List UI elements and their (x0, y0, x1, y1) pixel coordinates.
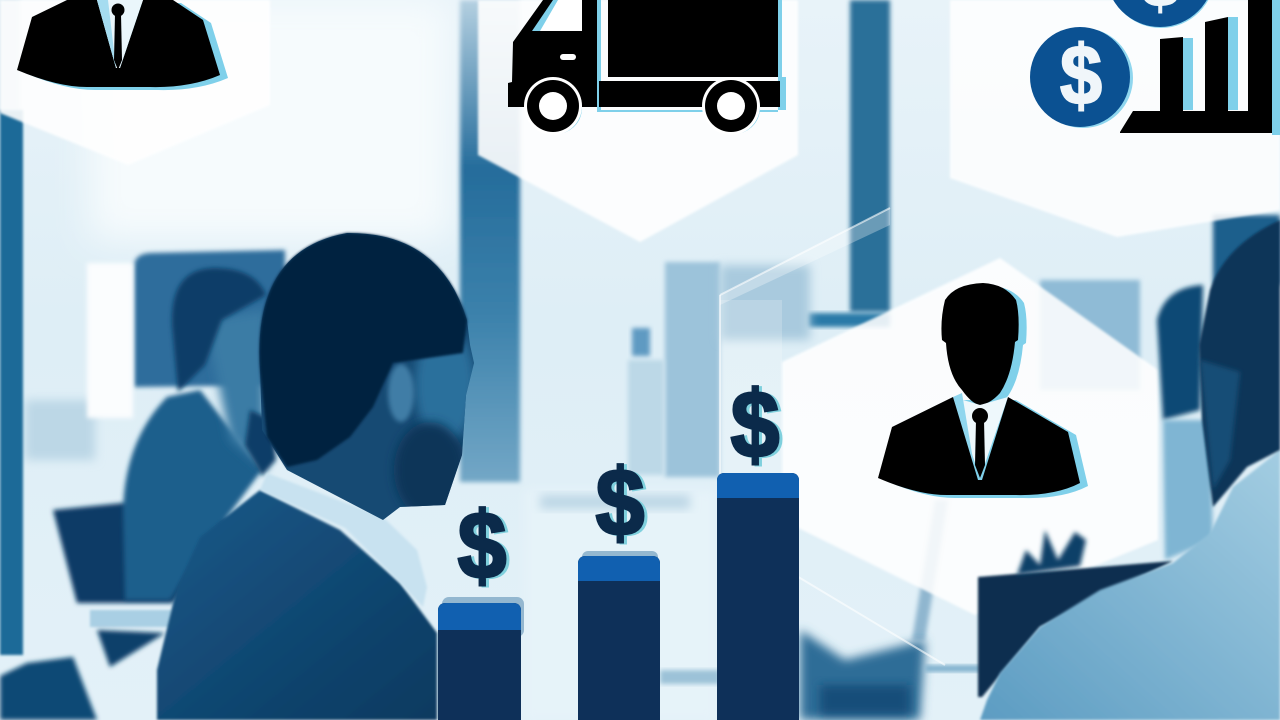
icon: businessman top left (17, 0, 228, 90)
blurred desk items (628, 360, 664, 475)
truck cargo box (608, 0, 778, 77)
bar 2 (578, 551, 660, 720)
colleague body (123, 390, 262, 600)
bar 1 (438, 597, 524, 720)
bar chart with dollar signs (438, 372, 799, 720)
hair (259, 233, 467, 467)
dollar signs: $ (458, 493, 506, 599)
colleague face (205, 310, 265, 470)
suit (157, 490, 437, 720)
blurred colleague left (0, 268, 276, 720)
blurred monitors centre (665, 262, 720, 477)
foreground man (157, 225, 480, 720)
hands (1017, 530, 1086, 575)
glasses area (1200, 360, 1240, 490)
centre column (460, 0, 520, 482)
shadow (886, 286, 1088, 498)
colleague chair (53, 503, 233, 603)
dollar signs: $ (731, 372, 779, 478)
truck cab (508, 0, 597, 107)
dollar signs: $ (596, 450, 644, 556)
under shelf (97, 630, 165, 667)
icon: delivery truck (508, 0, 786, 135)
face (412, 338, 474, 439)
truck wheels (530, 82, 582, 134)
second person hair (1157, 285, 1203, 420)
lower left chair (0, 657, 97, 720)
hexagon panel: top right (950, 0, 1280, 237)
dollar signs: $ (734, 373, 782, 479)
foreground head (1199, 220, 1280, 507)
laptop (978, 561, 1173, 697)
ear (388, 364, 414, 422)
left dark column (0, 110, 23, 655)
truck chassis (599, 81, 780, 107)
chart shadows (1183, 0, 1280, 135)
top coin (1106, 0, 1215, 28)
right column (850, 0, 890, 312)
laptop screen edge and desk (800, 500, 980, 720)
collar (260, 473, 427, 607)
shirt (97, 0, 143, 68)
blurred monitor left (134, 250, 285, 387)
shirt (953, 397, 1008, 478)
icon: coins and bar chart (1030, 0, 1280, 135)
shelf (90, 610, 172, 627)
jacket (878, 397, 1080, 495)
bar 3 (717, 473, 799, 720)
hexagon panel: lower right (720, 208, 1158, 665)
lower coin: $ (1060, 28, 1102, 122)
second person body (1163, 420, 1213, 560)
persons on right (978, 220, 1280, 720)
beard (394, 422, 466, 518)
dollar signs (458, 372, 782, 600)
shadow (25, 3, 228, 90)
chart bars (1120, 0, 1272, 133)
jacket (17, 0, 220, 87)
hexagon panel: top centre (478, 0, 798, 242)
cab window highlight and shadows (597, 0, 786, 112)
shirt (980, 450, 1280, 720)
head and neck (260, 233, 474, 520)
dollar signs: $ (599, 451, 647, 557)
dollar signs: $ (461, 494, 509, 600)
tie (112, 4, 124, 70)
head (941, 283, 1019, 405)
icon: businessman lower right (878, 283, 1088, 498)
colleague hair (172, 268, 266, 392)
hexagon panel: top left (0, 0, 270, 165)
lower coin (1030, 27, 1133, 128)
tie (972, 408, 988, 478)
